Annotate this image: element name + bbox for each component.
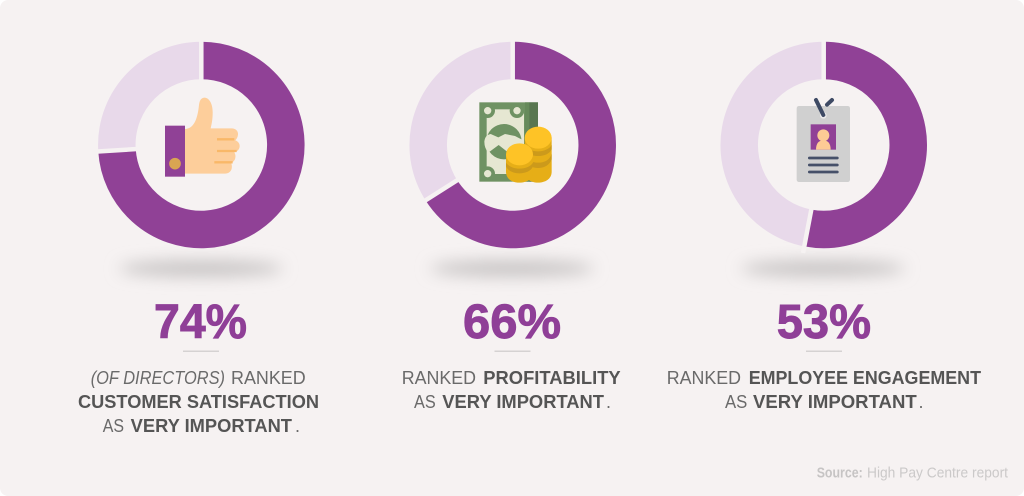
donut shadow: 53% <box>741 260 905 276</box>
description: customer satisfaction: RANKED <box>231 368 306 388</box>
description: employee engagement: AS <box>725 392 747 412</box>
description: profitability <box>402 368 621 412</box>
stat: 74%: 74% <box>154 296 247 349</box>
description: customer satisfaction <box>78 368 319 436</box>
stat: 66%: 66% <box>463 296 561 349</box>
icon: ID badge <box>797 100 850 182</box>
description: profitability: RANKED <box>402 368 476 388</box>
stat: 53%: 53% <box>777 296 871 349</box>
description: employee engagement: RANKED <box>667 368 741 388</box>
panel: profitability <box>402 30 621 412</box>
description: customer satisfaction: AS <box>103 416 124 436</box>
description: customer satisfaction: CUSTOMER SATISFACTION <box>78 392 319 412</box>
description: customer satisfaction: VERY IMPORTANT <box>131 416 292 436</box>
source note: High Pay Centre report <box>867 466 1008 482</box>
description: employee engagement <box>667 368 981 412</box>
description: customer satisfaction: . <box>295 416 300 436</box>
source note: Source: <box>817 466 863 482</box>
icon: thumbs up <box>165 98 240 177</box>
donut chart: 66% <box>420 30 597 230</box>
description: profitability: AS <box>414 392 436 412</box>
donut shadow: 74% <box>119 260 283 276</box>
description: customer satisfaction: (OF DIRECTORS) <box>91 368 225 388</box>
description: employee engagement: EMPLOYEE ENGAGEMENT <box>749 368 981 388</box>
panel: employee engagement <box>667 30 981 412</box>
description: profitability: VERY IMPORTANT <box>442 392 604 412</box>
donut shadow: 66% <box>430 260 594 276</box>
description: employee engagement: . <box>918 392 924 412</box>
panel: customer satisfaction <box>78 30 319 436</box>
icon: banknote and coins <box>479 102 552 183</box>
donut chart: 74% <box>92 30 286 230</box>
description: profitability: PROFITABILITY <box>483 368 621 388</box>
description: employee engagement: VERY IMPORTANT <box>753 392 917 412</box>
description: profitability: . <box>606 392 611 412</box>
donut chart: 53% <box>739 30 908 253</box>
